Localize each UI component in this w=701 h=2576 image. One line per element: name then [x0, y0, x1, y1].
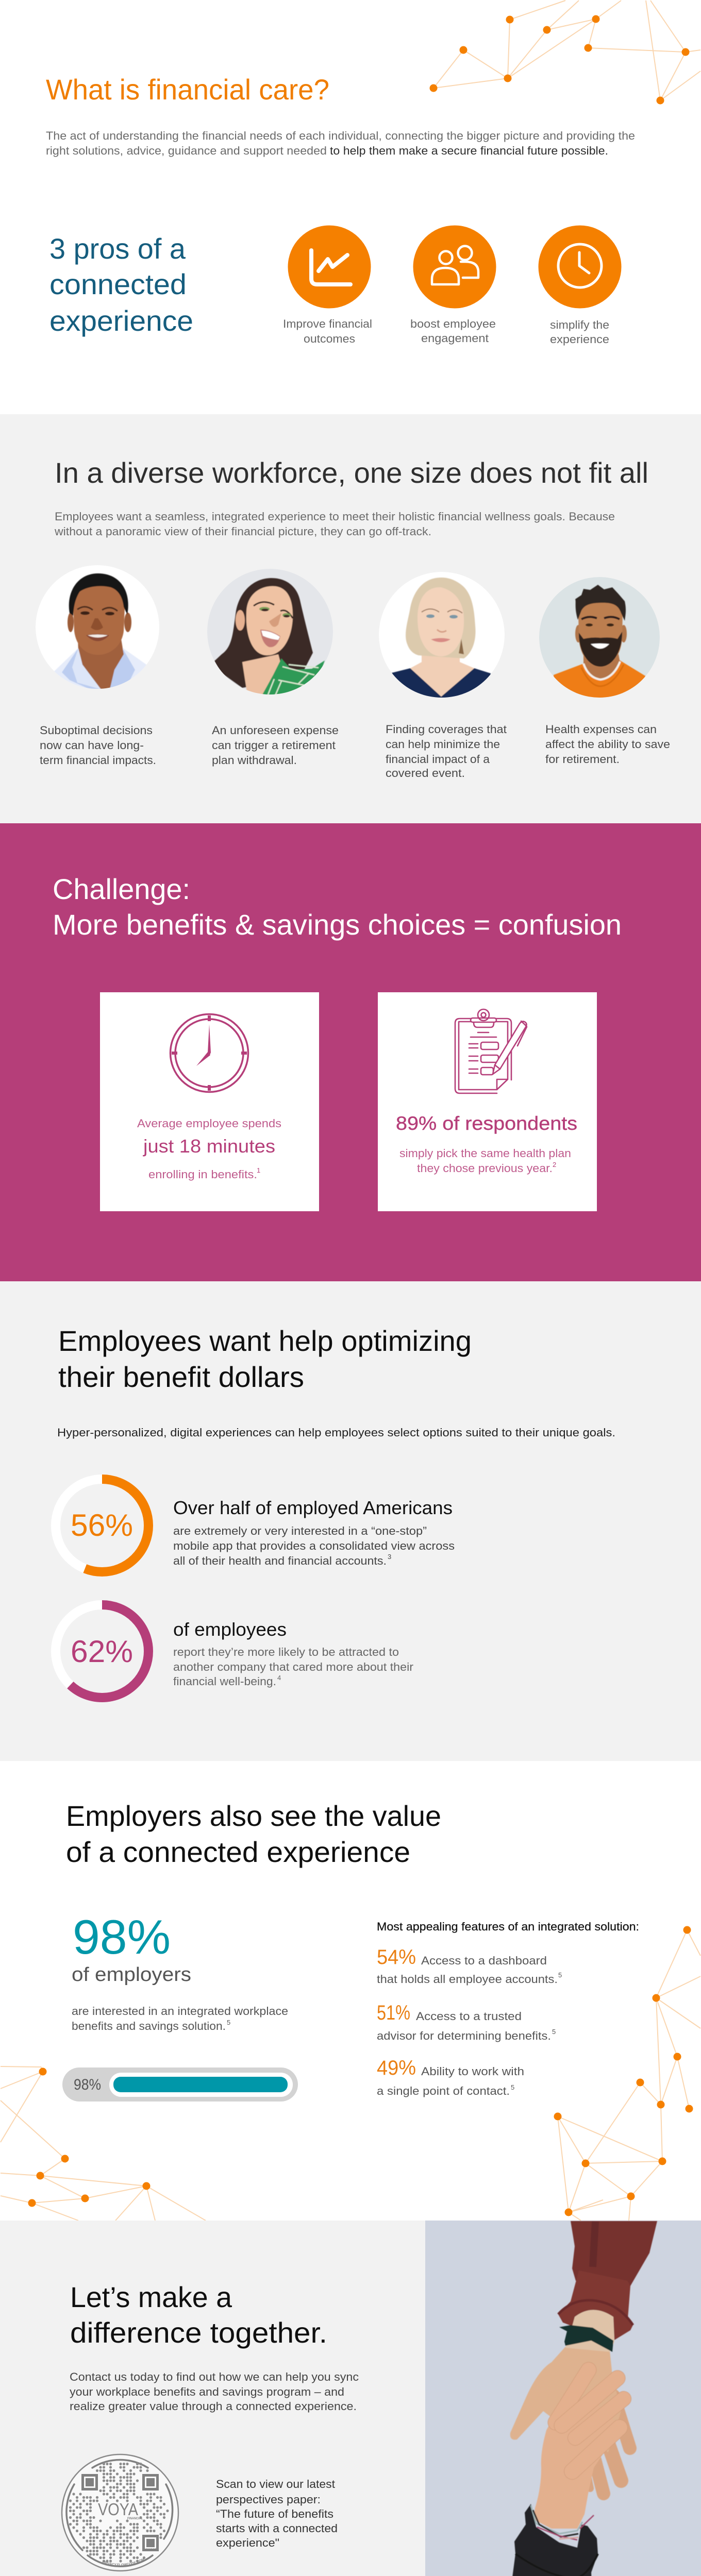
scan text: Scan to view our latest — [216, 2478, 335, 2490]
definition text: to help them make a secure financial future possible. — [330, 144, 608, 157]
donut chart: 62%: 62% — [71, 1634, 133, 1669]
heading: 3 pros: experience — [49, 304, 193, 337]
network decoration: top right — [430, 1, 700, 104]
feature: 54% — [377, 1946, 562, 1986]
portrait: blonde woman in navy top — [379, 572, 505, 701]
intro text — [54, 510, 615, 538]
feature: 49% — [377, 2057, 524, 2097]
scan text — [216, 2478, 338, 2549]
label: improve financial outcomes — [283, 317, 372, 345]
heading — [70, 2281, 327, 2349]
caption: suboptimal decisions — [40, 724, 156, 767]
wristband — [559, 2325, 613, 2352]
label: simplify the experience: experience — [550, 333, 609, 346]
text: 89% of respondents: 89% of respondents — [396, 1113, 577, 1134]
panel: employees want help — [0, 1281, 701, 1761]
stat text: over half of employed Americans — [173, 1497, 455, 1567]
big stat: 98% of employers — [72, 1910, 288, 2032]
caption: suboptimal decisions: Suboptimal decisions — [40, 724, 153, 737]
bracelets — [531, 2505, 582, 2534]
caption: finding coverages — [386, 723, 507, 779]
icon: people — [413, 226, 496, 308]
big stat: 98% of employers: benefits and savings solution. — [72, 2020, 226, 2032]
caption: finding coverages: can help minimize the — [386, 738, 500, 751]
caption: finding coverages: covered event. — [386, 767, 465, 779]
heading: Challenge: — [53, 873, 190, 905]
contact text: realize greater value through a connected experience. — [70, 2400, 357, 2413]
panel: what is financial care — [0, 0, 701, 414]
icon: growth chart — [288, 226, 371, 308]
feature: 51%: 51% — [377, 2002, 410, 2024]
text: 89% of respondents: simply pick the same health plan — [399, 1147, 571, 1160]
intro text: without a panoramic view of their financial picture, they can go off-track. — [54, 525, 431, 538]
network decoration: lower left — [1, 2066, 206, 2221]
big stat: 98% of employers: are interested in an integrated workplace — [72, 2005, 288, 2018]
progress bar: 98%: 98% — [74, 2076, 101, 2093]
hand behind (fingers) — [585, 2396, 630, 2494]
big stat: 98% of employers: of employers — [72, 1964, 191, 1986]
feature: 51%: Access to a trusted — [416, 2010, 522, 2023]
card: 89% of respondents — [378, 992, 597, 1211]
icon: clock — [538, 226, 622, 308]
feature: 54%: 54% — [377, 1946, 416, 1969]
heading: Employees want help optimizing — [58, 1325, 472, 1357]
stat text: over half of employed Americans: all of their health and financial accounts. — [173, 1554, 387, 1567]
network decoration: lower right — [554, 1926, 700, 2221]
portrait: bearded man in orange sweater — [539, 577, 660, 706]
panel: employers also see the value — [0, 1761, 701, 2221]
icon: clipboard and pen — [455, 1009, 527, 1093]
QR code — [61, 2453, 179, 2572]
label: boost employee engagement — [410, 317, 496, 345]
stat text: over half of employed Americans: 3 — [388, 1553, 391, 1561]
heading: their benefit dollars — [58, 1361, 304, 1393]
heading — [53, 873, 622, 941]
QR code: VOYA — [98, 2500, 138, 2519]
contact text — [70, 2370, 359, 2413]
stat text: of employees — [173, 1619, 413, 1688]
feature: 51%: advisor for determining benefits. — [377, 2029, 551, 2042]
text: 89% of respondents: they chose previous year. — [417, 1162, 553, 1175]
heading — [66, 1800, 441, 1868]
donut chart: 56% — [56, 1479, 148, 1572]
foreground hand — [534, 2426, 603, 2529]
caption: unforeseen expense — [212, 724, 339, 767]
portrait: man in blue shirt — [36, 565, 159, 696]
heading: difference together. — [70, 2316, 327, 2349]
card: 18 minutes — [100, 992, 319, 1211]
text: average employee: just 18 minutes — [143, 1136, 275, 1157]
heading: of a connected experience — [66, 1836, 410, 1868]
caption: unforeseen expense: An unforeseen expense — [212, 724, 339, 737]
heading — [58, 1325, 472, 1393]
caption: suboptimal decisions: now can have long- — [40, 739, 144, 752]
text: average employee — [137, 1117, 281, 1181]
caption: health expenses — [545, 723, 670, 766]
heading: 3 pros: connected — [49, 268, 187, 300]
panel: diverse workforce — [0, 414, 701, 823]
contact text: your workplace benefits and savings program – and — [70, 2385, 344, 2398]
stat text: over half of employed Americans: are extremely or very interested in a “one-stop” — [173, 1524, 427, 1537]
feature: 54%: Access to a dashboard — [421, 1954, 547, 1967]
label: improve financial outcomes: Improve financial — [283, 317, 372, 330]
heading: More benefits & savings choices = confusion — [53, 908, 622, 941]
icon: wall clock — [170, 1014, 248, 1092]
caption: finding coverages: Finding coverages that — [386, 723, 507, 736]
scan text: “The future of benefits — [216, 2507, 333, 2520]
feature: 49%: Ability to work with — [421, 2065, 524, 2078]
feature: 49%: a single point of contact. — [377, 2084, 510, 2097]
caption: health expenses: affect the ability to save — [545, 738, 670, 751]
stat text: of employees: report they’re more likely to be attracted to — [173, 1646, 399, 1658]
label: boost employee engagement: boost employee — [410, 317, 496, 330]
donut chart: 56%: 56% — [71, 1508, 133, 1543]
caption: health expenses: for retirement. — [545, 753, 620, 766]
stat text: of employees: financial well-being. — [173, 1675, 276, 1688]
intro text: Hyper-personalized, digital experiences can help employees select options suited to their unique goals. — [57, 1426, 615, 1439]
heading: 3 pros — [49, 232, 193, 337]
caption: suboptimal decisions: term financial impacts. — [40, 754, 156, 767]
stat text: of employees: another company that cared more about their — [173, 1660, 413, 1673]
scan text: experience" — [216, 2536, 279, 2549]
definition text: right solutions, advice, guidance and support needed — [46, 144, 327, 157]
caption: unforeseen expense: can trigger a retirement — [212, 739, 336, 752]
heading: Employers also see the value — [66, 1800, 441, 1832]
caption: finding coverages: financial impact of a — [386, 753, 490, 766]
intro text: Employees want a seamless, integrated experience to meet their holistic financial wellness goals. Because — [55, 510, 615, 523]
features heading: Most appealing features of an integrated solution: — [377, 1920, 639, 1933]
text: average employee: enrolling in benefits. — [148, 1168, 257, 1181]
QR code: FINANCIAL — [127, 2517, 143, 2520]
contact text: Contact us today to find out how we can help you sync — [70, 2370, 359, 2383]
portrait: woman laughing in green shirt — [207, 569, 333, 701]
black sleeve — [507, 2504, 598, 2576]
stat text: of employees: 4 — [277, 1674, 281, 1682]
heading: Let’s make a — [70, 2281, 232, 2313]
stat text: of employees: of employees — [173, 1619, 287, 1640]
text: 89% of respondents — [396, 1113, 577, 1175]
red sleeve — [571, 2221, 657, 2286]
QR code: FLOWCODE — [142, 2549, 159, 2552]
features list — [377, 1920, 639, 2097]
heading: In a diverse workforce, one size does not fit all — [55, 456, 648, 489]
text: 89% of respondents: 2 — [553, 1161, 556, 1168]
big stat: 98% of employers: 98% — [73, 1910, 171, 1964]
feature: 49%: 5 — [511, 2083, 514, 2091]
scan text: perspectives paper: — [216, 2493, 321, 2506]
text: average employee: Average employee spends — [137, 1117, 281, 1130]
donut chart: 62% — [56, 1605, 148, 1698]
caption: health expenses: Health expenses can — [545, 723, 657, 736]
feature: 49%: 49% — [377, 2057, 416, 2079]
photo: two hands reaching — [425, 2221, 701, 2576]
label: simplify the experience: simplify the — [550, 318, 609, 331]
title: What is financial care? — [46, 73, 329, 106]
progress bar: 98% — [62, 2067, 298, 2102]
definition text — [46, 129, 635, 157]
feature: 51%: 5 — [552, 2028, 556, 2036]
panel: call to action — [0, 2221, 701, 2576]
feature: 51% — [377, 2002, 556, 2042]
stat text: over half of employed Americans: Over half of employed Americans — [173, 1497, 453, 1518]
scan text: starts with a connected — [216, 2522, 338, 2535]
big stat: 98% of employers: 5 — [227, 2019, 230, 2026]
heading: 3 pros: 3 pros of a — [49, 232, 186, 265]
label: improve financial outcomes: outcomes — [304, 332, 355, 345]
label: simplify the experience — [550, 318, 609, 346]
feature: 54%: that holds all employee accounts. — [377, 1973, 558, 1986]
label: boost employee engagement: engagement — [421, 332, 489, 345]
panel: challenge — [0, 823, 701, 1281]
caption: unforeseen expense: plan withdrawal. — [212, 754, 297, 767]
text: average employee: 1 — [257, 1166, 260, 1174]
QR code: PRIVACY.FLOWCODE.COM — [102, 2558, 144, 2566]
stat text: over half of employed Americans: mobile app that provides a consolidated view across — [173, 1539, 455, 1552]
feature: 54%: 5 — [558, 1971, 562, 1979]
definition text: The act of understanding the financial needs of each individual, connecting the bigger picture and providing the — [46, 129, 635, 142]
